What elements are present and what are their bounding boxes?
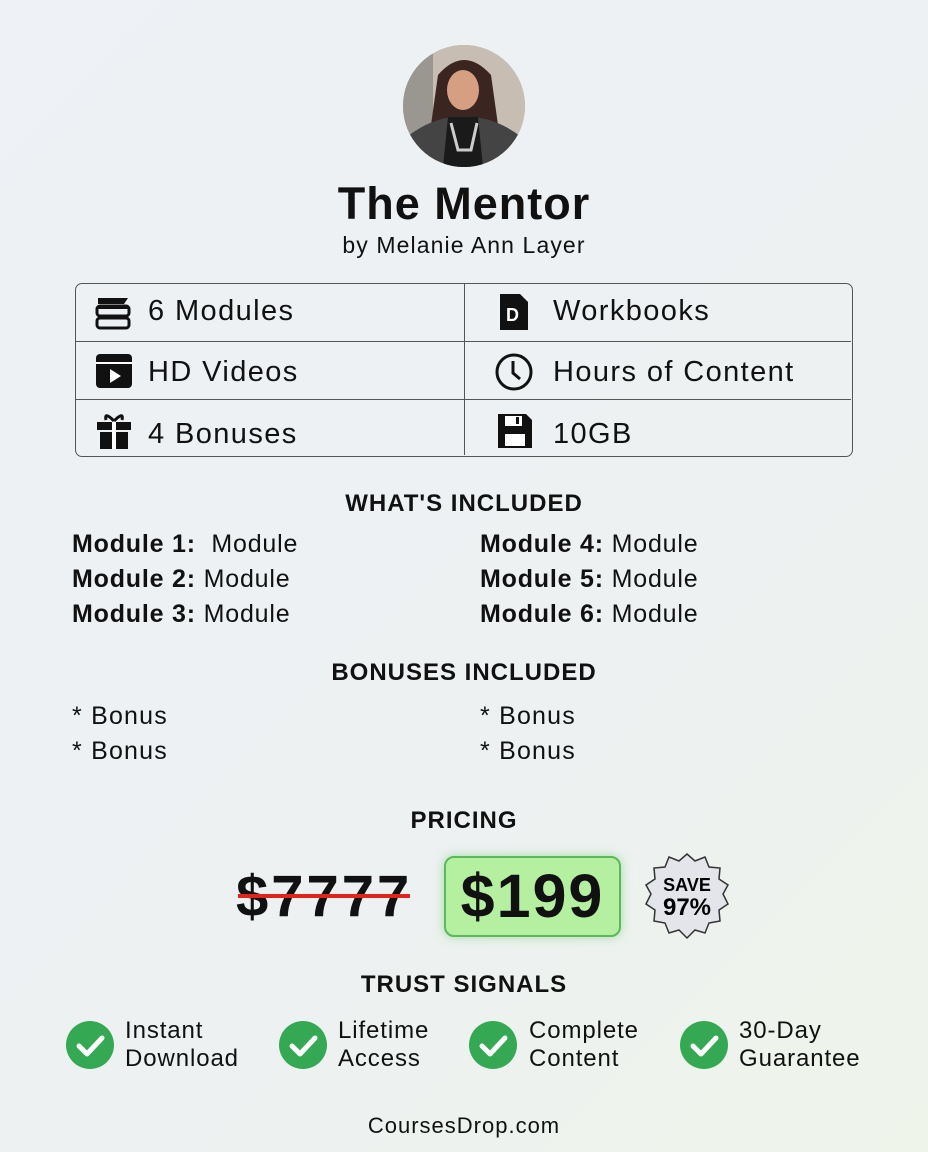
trust signals: Complete bbox=[529, 1017, 639, 1044]
trust signals: 30-Day bbox=[739, 1017, 822, 1044]
module list: Module 3: Module bbox=[72, 600, 290, 628]
heading: what's included: WHAT'S INCLUDED bbox=[345, 490, 583, 517]
text: hours: Hours of Content bbox=[553, 356, 795, 388]
module list: Module 1: Module bbox=[72, 530, 298, 558]
bonus list: * Bonus bbox=[72, 702, 168, 730]
module list: Module 2: Module bbox=[72, 565, 290, 593]
icon: floppy bbox=[498, 414, 532, 448]
heading: bonuses: BONUSES INCLUDED bbox=[331, 659, 597, 686]
badge: save: 97% bbox=[663, 894, 711, 921]
heading: trust: TRUST SIGNALS bbox=[361, 971, 567, 998]
old price: $7777 bbox=[236, 864, 412, 929]
footer: CoursesDrop.com bbox=[368, 1113, 560, 1138]
icon: document: D bbox=[506, 305, 519, 325]
title: The Mentor bbox=[338, 178, 590, 229]
text: bonuses: 4 Bonuses bbox=[148, 418, 298, 450]
module list bbox=[72, 530, 698, 628]
trust signals: Lifetime bbox=[338, 1017, 429, 1044]
heading: pricing: PRICING bbox=[410, 807, 518, 834]
new price box: $199 bbox=[461, 862, 604, 930]
trust signals: Access bbox=[338, 1045, 421, 1072]
icon: video bbox=[96, 354, 132, 388]
bonus list bbox=[72, 702, 576, 765]
icon: gift bbox=[97, 414, 131, 449]
subtitle: by Melanie Ann Layer bbox=[342, 232, 586, 258]
new price box bbox=[444, 856, 621, 937]
module list: Module 5: Module bbox=[480, 565, 698, 593]
icon: clock bbox=[496, 354, 532, 390]
badge: save: SAVE bbox=[663, 875, 711, 895]
avatar bbox=[403, 45, 525, 167]
trust signals: Guarantee bbox=[739, 1045, 861, 1072]
features table bbox=[75, 283, 853, 457]
module list: Module 6: Module bbox=[480, 600, 698, 628]
badge: save bbox=[645, 853, 729, 939]
trust signals bbox=[66, 1017, 861, 1072]
module list: Module 4: Module bbox=[480, 530, 698, 558]
text: workbooks: Workbooks bbox=[553, 295, 710, 327]
bonus list: * Bonus bbox=[480, 702, 576, 730]
bonus list: * Bonus bbox=[480, 737, 576, 765]
text: modules: 6 Modules bbox=[148, 295, 294, 327]
trust signals: Content bbox=[529, 1045, 619, 1072]
text: hd videos: HD Videos bbox=[148, 356, 299, 388]
icon: document bbox=[500, 294, 528, 330]
icon: books bbox=[96, 298, 130, 330]
text: size: 10GB bbox=[553, 418, 633, 450]
trust signals: Instant bbox=[125, 1017, 203, 1044]
bonus list: * Bonus bbox=[72, 737, 168, 765]
trust signals: Download bbox=[125, 1045, 239, 1072]
